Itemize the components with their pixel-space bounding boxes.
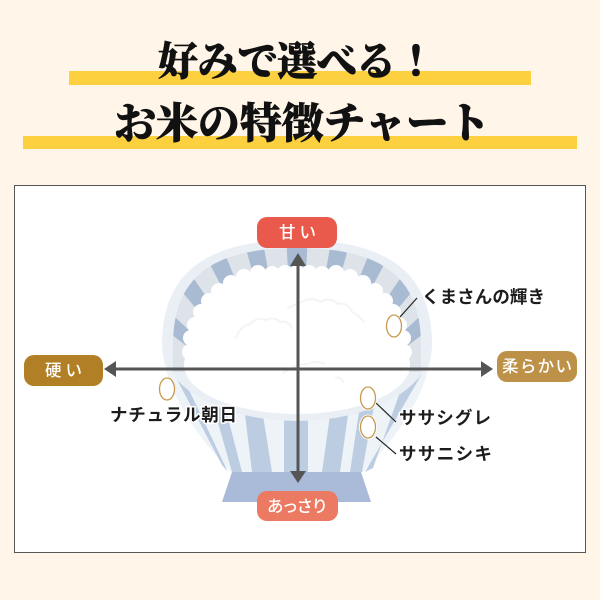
rice grain: ナチュラル朝日 bbox=[110, 378, 237, 425]
badge: light: あっさり bbox=[267, 497, 328, 516]
rice grain: くまさんの輝き bbox=[386, 287, 545, 337]
panel: chart bbox=[14, 186, 586, 552]
arrow: vertical axis bbox=[290, 253, 306, 483]
bowl foot bbox=[222, 472, 371, 502]
badge: hard: 硬い bbox=[45, 362, 82, 380]
title: line 1 bbox=[69, 39, 531, 85]
badge: hard bbox=[24, 355, 103, 386]
rice grain: ササシグレ bbox=[359, 386, 491, 428]
badge: sweet: 甘い bbox=[279, 223, 316, 242]
rice grain: くまさんの輝き: くまさんの輝き bbox=[422, 287, 545, 307]
title: line 1: 好みで選べる！ bbox=[158, 39, 436, 84]
rice inside bowl bbox=[182, 265, 412, 414]
rice grain: ササニシキ bbox=[359, 414, 492, 464]
badge: sweet bbox=[257, 217, 337, 248]
arrow: horizontal axis bbox=[104, 361, 493, 377]
rice grain: ナチュラル朝日: ナチュラル朝日 bbox=[110, 405, 237, 425]
icon: rice bowl bbox=[162, 242, 432, 502]
badge: soft bbox=[497, 351, 577, 382]
bowl rim bbox=[162, 240, 432, 421]
bowl body stripes bbox=[173, 372, 423, 472]
badge: soft: 柔らかい bbox=[502, 357, 572, 376]
bowl body bbox=[162, 345, 432, 472]
title: line 2: お米の特徴チャート bbox=[114, 101, 490, 148]
badge: light bbox=[257, 491, 338, 521]
rice grain: ササニシキ: ササニシキ bbox=[399, 444, 492, 464]
rice texture bbox=[236, 299, 364, 382]
rice grain: ササシグレ: ササシグレ bbox=[399, 408, 491, 428]
rim stripe band bbox=[173, 248, 421, 372]
title: line 2 bbox=[23, 101, 577, 149]
